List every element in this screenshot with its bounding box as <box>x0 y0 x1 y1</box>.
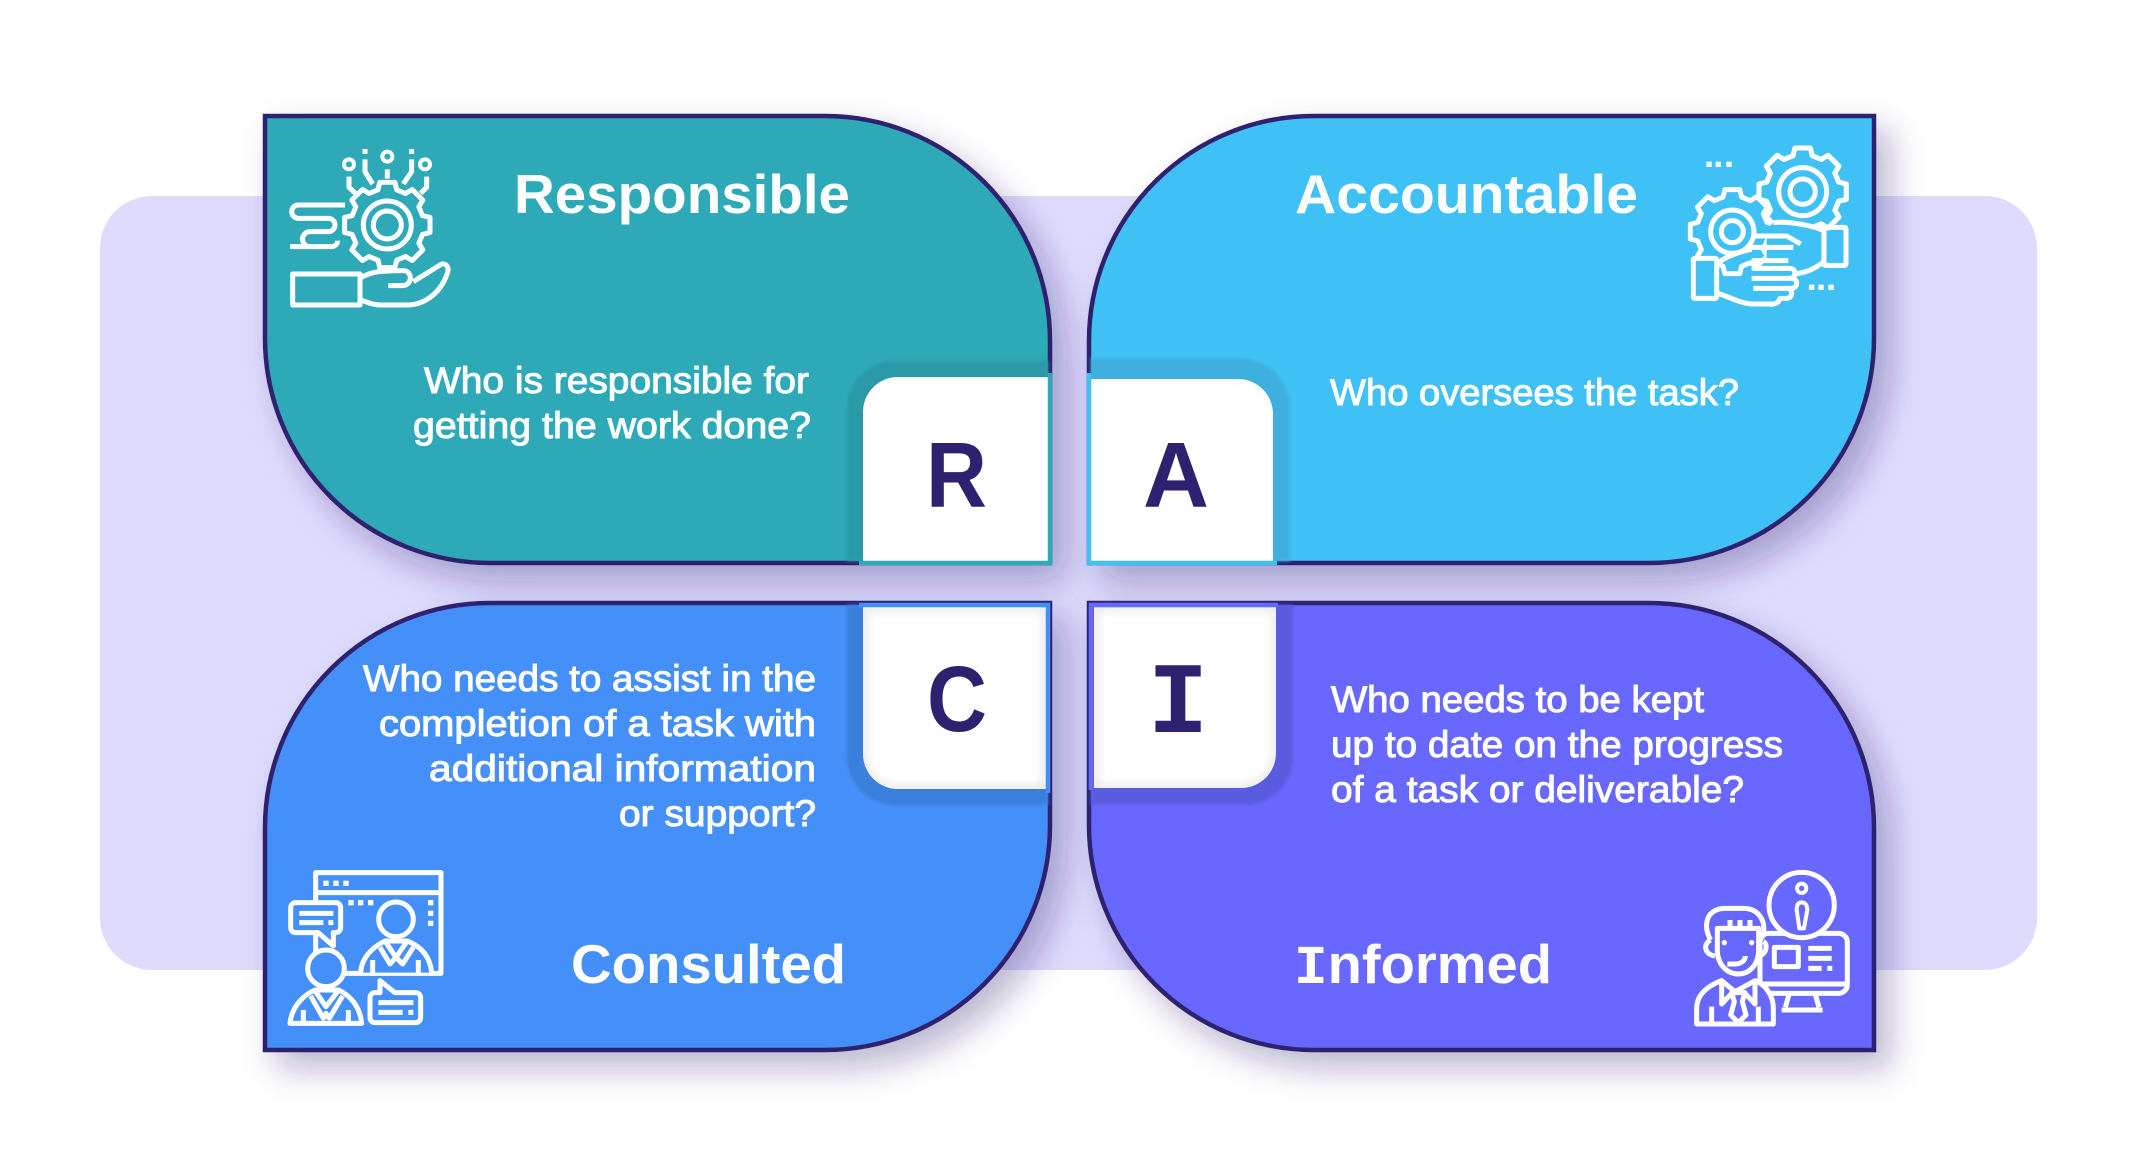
letter tile: A <box>1089 358 1290 563</box>
question: Consulted: additional information <box>429 748 816 789</box>
panel: Informed <box>1089 603 1874 1050</box>
letter tile: C: C <box>927 647 987 751</box>
letter tile: I <box>1091 605 1293 805</box>
panel: Accountable <box>1089 116 1874 563</box>
background band <box>100 196 2037 970</box>
question: Responsible: getting the work done? <box>413 405 811 446</box>
question: Consulted: completion of a task with <box>379 703 816 744</box>
question: Responsible: Who is responsible for <box>424 360 809 401</box>
letter tile: R <box>847 361 1050 563</box>
icon: gear in hand <box>290 149 448 305</box>
question: Informed: Who needs to be kept <box>1331 679 1705 720</box>
question: Consulted <box>363 658 816 834</box>
panel: Consulted <box>265 603 1050 1050</box>
title: Consulted: Consulted <box>571 933 846 995</box>
title: Informed: Informed <box>1294 933 1552 1000</box>
letter tile: R: R <box>926 423 987 527</box>
question: Accountable: Who oversees the task? <box>1330 372 1739 413</box>
title: Responsible: Responsible <box>514 163 850 225</box>
question: Informed: up to date on the progress <box>1331 724 1783 765</box>
question: Consulted: or support? <box>619 793 816 834</box>
letter tile: C <box>847 605 1048 805</box>
title: Accountable: Accountable <box>1295 163 1638 225</box>
question: Consulted: Who needs to assist in the <box>363 658 816 699</box>
panel: Responsible <box>265 116 1050 563</box>
letter tile: I: I <box>1148 649 1208 763</box>
icon: video consultation <box>290 873 441 1023</box>
icon: gears and handshake <box>1690 148 1846 304</box>
question: Informed: of a task or deliverable? <box>1331 769 1744 810</box>
icon: person with monitor and info <box>1697 872 1847 1024</box>
letter tile: A: A <box>1143 423 1209 527</box>
question: Informed <box>1331 679 1783 810</box>
question: Responsible <box>413 360 811 446</box>
